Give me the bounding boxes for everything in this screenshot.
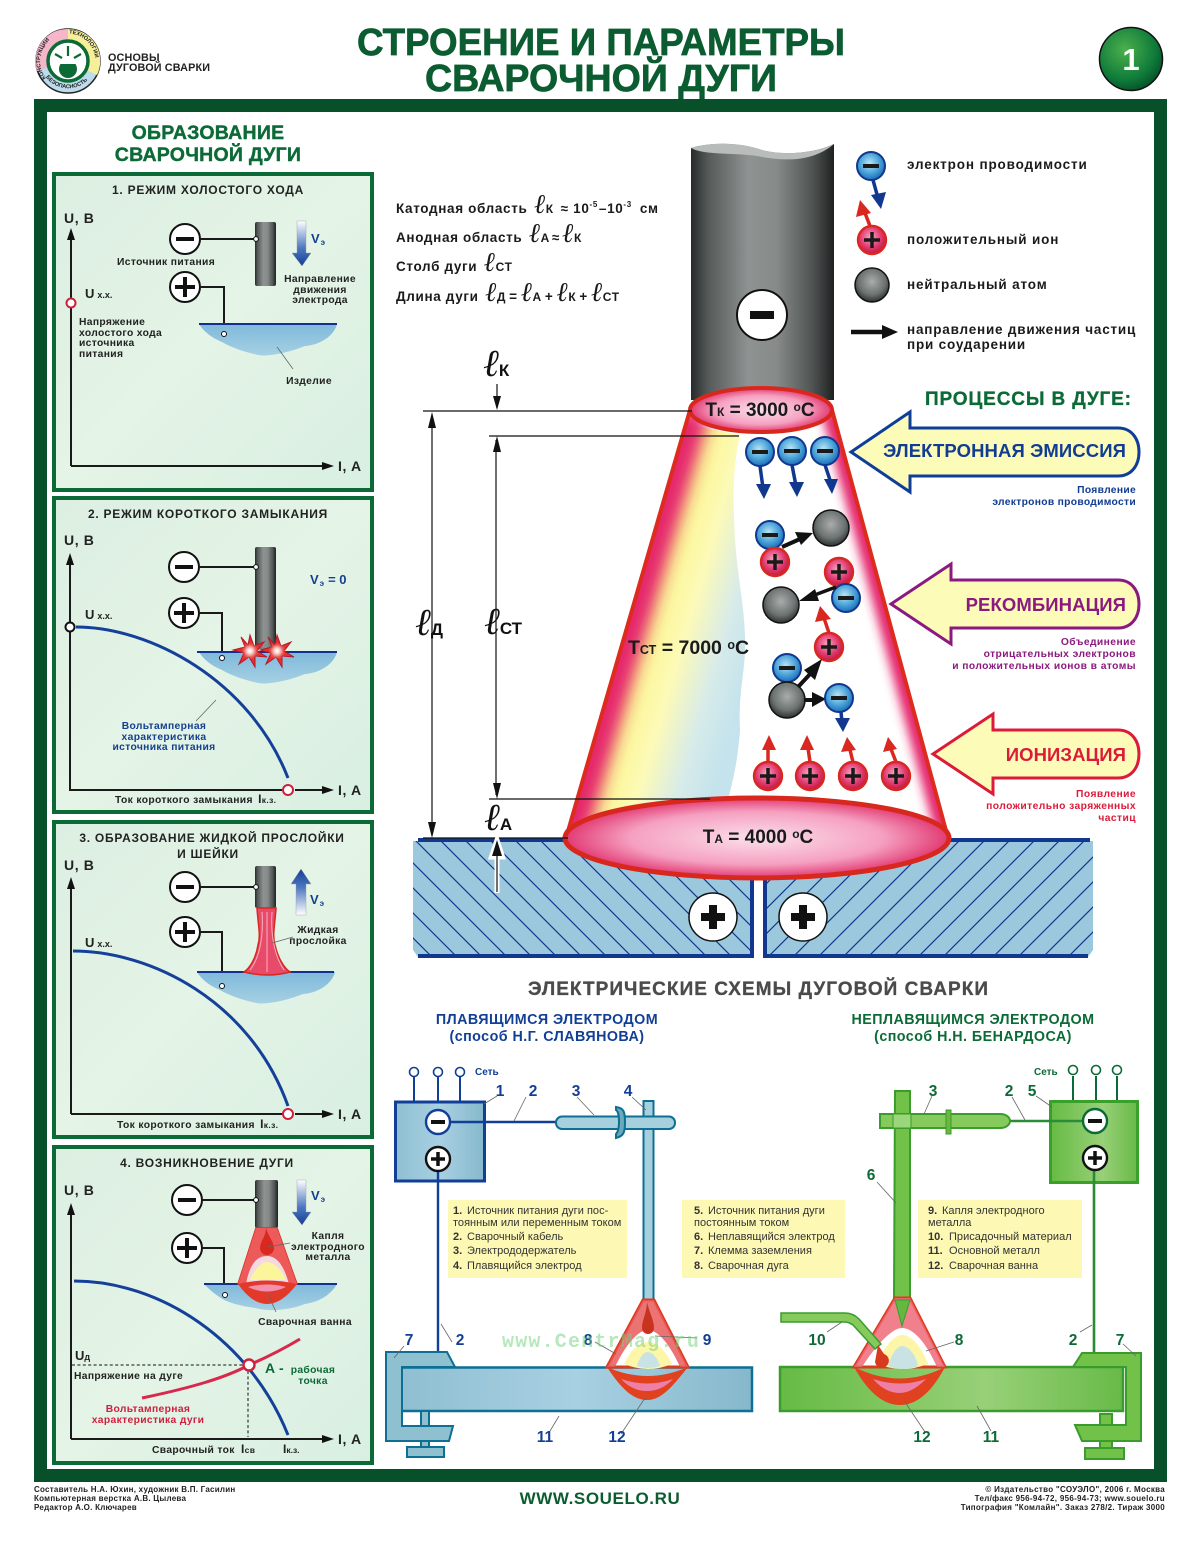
footer credits: Составитель Н.А. Юхин, художник В.П. Гасилин [34,1485,236,1494]
parts list 1-4: Источник питания дуги пос- [467,1205,609,1217]
footer website: WWW.SOUELO.RU [520,1489,680,1508]
cathode spot: о [794,400,801,414]
footer publisher: Типография "Комлайн". Заказ 278/2. Тираж 3000 [961,1503,1165,1512]
panel 3: liquid bridge and neck: И ШЕЙКИ [177,846,239,861]
panel 2: short circuit: V [310,572,319,587]
panel 1: open circuit: э [321,238,326,247]
panel 1: open circuit: I, A [338,458,362,474]
panel 1: open circuit: Источник питания [117,257,215,268]
diagram: non-consumable electrode: 3 [929,1083,938,1100]
anode spot [565,798,949,878]
panel 2: short circuit: Ток короткого замыкания Iк.з. [115,792,276,806]
heading: arc formation: ОБРАЗОВАНИЕ [132,122,284,144]
caption: recombination: и положительных ионов в атомы [952,661,1136,672]
panel 4: arc initiation: 4. ВОЗНИКНОВЕНИЕ ДУГИ [120,1156,294,1170]
parts list 5-8: Клемма заземления [708,1245,812,1257]
la label: ℓА [484,797,512,839]
lk label: ℓК [483,343,510,385]
legend: ion: положительный ион [907,232,1059,247]
panel 3: liquid bridge and neck [54,822,372,1137]
panel 3: liquid bridge and neck: I, A [338,1106,362,1122]
panel 4: arc initiation: Uд [75,1348,90,1363]
parts list 5-8: Источник питания дуги [708,1205,825,1217]
panel 4: arc initiation: Iк.з. [283,1442,300,1456]
diagram: consumable electrode: 1 [496,1083,505,1100]
ionization group [769,606,853,732]
column temperature: TСТ = 7000 [628,637,722,659]
arrow: electron emission: ЭЛЕКТРОННАЯ ЭМИССИЯ [883,440,1126,461]
panel 3: liquid bridge and neck: Ток короткого замыкания Iк.з. [117,1117,278,1131]
formulas: Столб дуги ℓСТ [396,247,513,277]
logo emblem: БЕЗОПАСНОСТЬ [46,74,87,88]
logo emblem [35,28,101,94]
formulas: -5 [590,200,598,209]
panel 2: short circuit: Вольтамперная [122,721,206,732]
parts list 9-12: 12. [928,1260,943,1272]
panel 1: open circuit: V [311,231,320,246]
heading: circuits: ЭЛЕКТРИЧЕСКИЕ СХЕМЫ ДУГОВОЙ СВАРКИ [528,978,988,1000]
column temperature: С [735,637,749,659]
panel 1: open circuit [54,174,372,490]
arrow: electron emission [851,412,1139,492]
diagram: consumable electrode: 12 [608,1429,626,1446]
diagram: non-consumable electrode: 2 [1005,1083,1013,1100]
logo emblem: КОНСТРУКЦИИ [36,38,50,80]
caption: emission: электронов проводимости [992,497,1136,508]
cathode spot: TК = 3000 [705,400,788,421]
caption: ionization: положительно заряженных [986,801,1136,812]
footer credits: Редактор А.О. Ключарев [34,1503,137,1512]
diagram: consumable electrode: 3 [572,1083,581,1100]
parts list 1-4: 1. [453,1205,462,1217]
processes heading: ПРОЦЕССЫ В ДУГЕ: [925,389,1131,410]
panel 1: open circuit: Напряжение [79,317,145,328]
panel 3: liquid bridge and neck: прослойка [289,936,347,947]
panel 3: liquid bridge and neck: Жидкая [296,925,339,936]
panel 1: open circuit: движения [293,285,347,296]
arrow: recombination: РЕКОМБИНАЦИЯ [966,594,1126,615]
caption: recombination: Объединение [1061,636,1136,648]
panel 4: arc initiation: I, A [338,1431,362,1447]
diagram: non-consumable electrode: 10 [808,1332,826,1349]
formulas: -3 [623,200,632,209]
caption: recombination: отрицательных электронов [984,649,1136,660]
watermark: www.CentrMag.ru [502,1331,700,1354]
legend: direction [851,322,1136,352]
panel 4: arc initiation: точка [298,1376,328,1387]
panel 4: arc initiation [54,1147,372,1463]
panel 1: open circuit: источника [79,338,135,349]
lst label: ℓСТ [484,601,523,643]
panel 2: short circuit: U, B [64,532,94,548]
parts list 9-12: Капля электродного [942,1205,1045,1217]
parts list 1-4: Плавящийся электрод [467,1260,582,1272]
panel 2: short circuit: U х.х. [85,607,112,622]
panel 2: short circuit: = 0 [328,572,347,587]
parts list 9-12: металла [928,1217,972,1229]
footer publisher: Тел/факс 956-94-72, 956-94-73; www.souelo.ru [975,1494,1165,1503]
parts list 5-8: 7. [694,1245,703,1257]
diagram: non-consumable electrode [780,1066,1141,1459]
parts list 5-8: Неплавящийся электрод [708,1231,835,1243]
subheading: non-consumable: НЕПЛАВЯЩИМСЯ ЭЛЕКТРОДОМ [852,1012,1094,1028]
heading: arc formation: СВАРОЧНОЙ ДУГИ [115,142,301,166]
diagram: consumable electrode: 4 [624,1083,633,1100]
diagram: non-consumable electrode: Сеть [1034,1067,1058,1078]
recombination group 1 [756,510,849,576]
panel 2: short circuit: I, A [338,782,362,798]
la arrow [490,837,504,893]
caption: ionization: частиц [1098,813,1136,824]
legend: electron [857,152,1088,209]
parts list 5-8: 8. [694,1260,703,1272]
panel 4: arc initiation: электродного [291,1242,365,1253]
parts list 5-8: 5. [694,1205,703,1217]
parts list 9-12: Основной металл [949,1245,1040,1257]
parts list 1-4: тоянным или переменным током [453,1217,621,1229]
panel 4: arc initiation: А - [265,1360,284,1376]
legend: atom [855,268,1048,302]
subheading: non-consumable: (способ Н.Н. БЕНАРДОСА) [874,1029,1072,1045]
parts list 1-4: Электрододержатель [467,1245,577,1257]
arc cone [560,410,948,838]
formulas [396,189,659,307]
panel 2: short circuit: 2. РЕЖИМ КОРОТКОГО ЗАМЫКАНИЯ [88,507,328,521]
workpiece right [765,840,1093,958]
formulas: Анодная область ℓА≈ℓК [396,218,582,248]
anode spot: о [792,827,800,841]
legend: electron: электрон проводимости [907,157,1088,172]
parts list 1-4: 2. [453,1231,462,1243]
logo emblem: ТЕХНОЛОГИИ [69,30,99,58]
diagram: non-consumable electrode: 2 [1069,1332,1077,1349]
formulas: –10 [599,201,623,216]
ld label: ℓД [415,602,443,644]
formulas: см [640,201,659,216]
subheading: consumable: ПЛАВЯЩИМСЯ ЭЛЕКТРОДОМ [436,1012,658,1028]
diagram: non-consumable electrode: 12 [913,1429,931,1446]
main title: СТРОЕНИЕ И ПАРАМЕТРЫ [357,22,845,64]
diagram: non-consumable electrode: 5 [1028,1083,1037,1100]
electrode cathode [691,144,834,400]
arrow: ionization [933,714,1139,794]
arrow: ionization: ИОНИЗАЦИЯ [1006,744,1126,765]
electrons emitted [746,437,839,499]
legend: direction: при соударении [907,337,1026,352]
panel 1: open circuit: U х.х. [85,286,112,301]
panel 4: arc initiation: Капля [312,1231,344,1242]
cathode spot [690,388,832,432]
diagram: consumable electrode: 11 [537,1429,554,1446]
dimension lines [423,384,739,838]
parts list 5-8: 6. [694,1231,703,1243]
recombination group 2 [763,558,860,623]
series label: ДУГОВОЙ СВАРКИ [108,61,210,74]
parts list 5-8 [682,1200,845,1278]
diagram: consumable electrode: 8 [584,1332,593,1349]
diagram: consumable electrode [386,1067,752,1457]
parts list 5-8: постоянным током [694,1217,789,1229]
legend: ion [856,200,1059,254]
legend: atom: нейтральный атом [907,277,1048,292]
dimension arrowheads [428,396,501,838]
panel 4: arc initiation: V [311,1188,320,1203]
formulas: Длина дуги ℓД=ℓА+ℓК+ℓСТ [396,277,620,307]
panel 1: open circuit: Изделие [286,376,332,387]
parts list 1-4: Сварочный кабель [467,1231,564,1243]
panel 4: arc initiation: Сварочная ванна [258,1317,352,1328]
panel 4: arc initiation: Напряжение на дуге [74,1371,183,1382]
diagram: non-consumable electrode: 11 [983,1429,1000,1446]
panel 2: short circuit: э [320,579,325,588]
diagram: consumable electrode: 9 [703,1332,712,1349]
positive ions rising [754,735,910,790]
parts list 9-12 [918,1200,1082,1278]
panel 1: open circuit: U, B [64,210,94,226]
parts list 1-4 [448,1200,627,1278]
panel 1: open circuit: 1. РЕЖИМ ХОЛОСТОГО ХОДА [112,183,304,197]
caption: emission: Появление [1077,485,1136,496]
diagram: non-consumable electrode: 6 [867,1167,876,1184]
diagram: non-consumable electrode: 8 [955,1332,964,1349]
panel 3: liquid bridge and neck: э [320,899,325,908]
anode spot: TА = 4000 [703,827,787,848]
panel 3: liquid bridge and neck: 3. ОБРАЗОВАНИЕ ЖИДКОЙ ПРОСЛОЙКИ [79,830,345,845]
diagram: consumable electrode: Сеть [475,1067,499,1078]
diagram: consumable electrode: 2 [456,1332,464,1349]
formulas: Катодная область ℓК ≈ 10 [396,189,590,219]
panel 2: short circuit: источника питания [112,742,216,753]
subheading: consumable: (способ Н.Г. СЛАВЯНОВА) [449,1029,645,1045]
parts list 9-12: 10. [928,1231,943,1243]
anode plus terminals [689,893,827,941]
arrow: recombination [891,564,1139,644]
sheet number badge: 1 [1122,42,1140,77]
diagram: consumable electrode: 2 [529,1083,537,1100]
parts list 9-12: Сварочная ванна [949,1260,1039,1272]
panel 1: open circuit: электрода [292,295,348,306]
parts list 9-12: 9. [928,1205,937,1217]
panel 3: liquid bridge and neck: U х.х. [85,935,112,950]
diagram: consumable electrode: 7 [405,1332,413,1349]
panel 2: short circuit: характеристика [122,732,206,743]
diagram: non-consumable electrode: 7 [1116,1332,1124,1349]
footer credits: Компьютерная верстка А.В. Цылева [34,1494,186,1503]
legend: direction: направление движения частиц [907,322,1136,337]
main title: СВАРОЧНОЙ ДУГИ [425,55,777,100]
footer publisher: © Издательство "СОУЭЛО", 2006 г. Москва [985,1485,1165,1494]
panel 4: arc initiation: металла [305,1252,351,1263]
panel 4: arc initiation: рабочая [291,1364,335,1376]
panel 1: open circuit: холостого хода [79,328,162,339]
panel 2: short circuit [54,498,372,812]
panel 4: arc initiation: U, B [64,1182,94,1198]
parts list 9-12: Присадочный материал [949,1231,1072,1243]
parts list 9-12: 11. [928,1245,943,1257]
panel 1: open circuit: Направление [284,274,356,285]
panel 4: arc initiation: Вольтамперная [106,1404,190,1415]
panel 3: liquid bridge and neck: U, B [64,857,94,873]
panel 1: open circuit: питания [79,349,123,360]
caption: ionization: Появление [1076,789,1136,800]
panel 3: liquid bridge and neck: V [310,892,319,907]
parts list 5-8: Сварочная дуга [708,1260,790,1272]
series label: ОСНОВЫ [108,52,160,64]
panel 4: arc initiation: характеристика дуги [92,1415,204,1426]
panel 4: arc initiation: э [321,1195,326,1204]
cathode spot: С [801,400,815,421]
column temperature: о [727,638,735,652]
panel 4: arc initiation: Сварочный ток Iсв [152,1442,255,1456]
parts list 1-4: 3. [453,1245,462,1257]
sheet number badge [1100,28,1162,90]
parts list 1-4: 4. [453,1260,462,1272]
workpiece left [413,840,754,958]
anode spot: С [800,827,814,848]
